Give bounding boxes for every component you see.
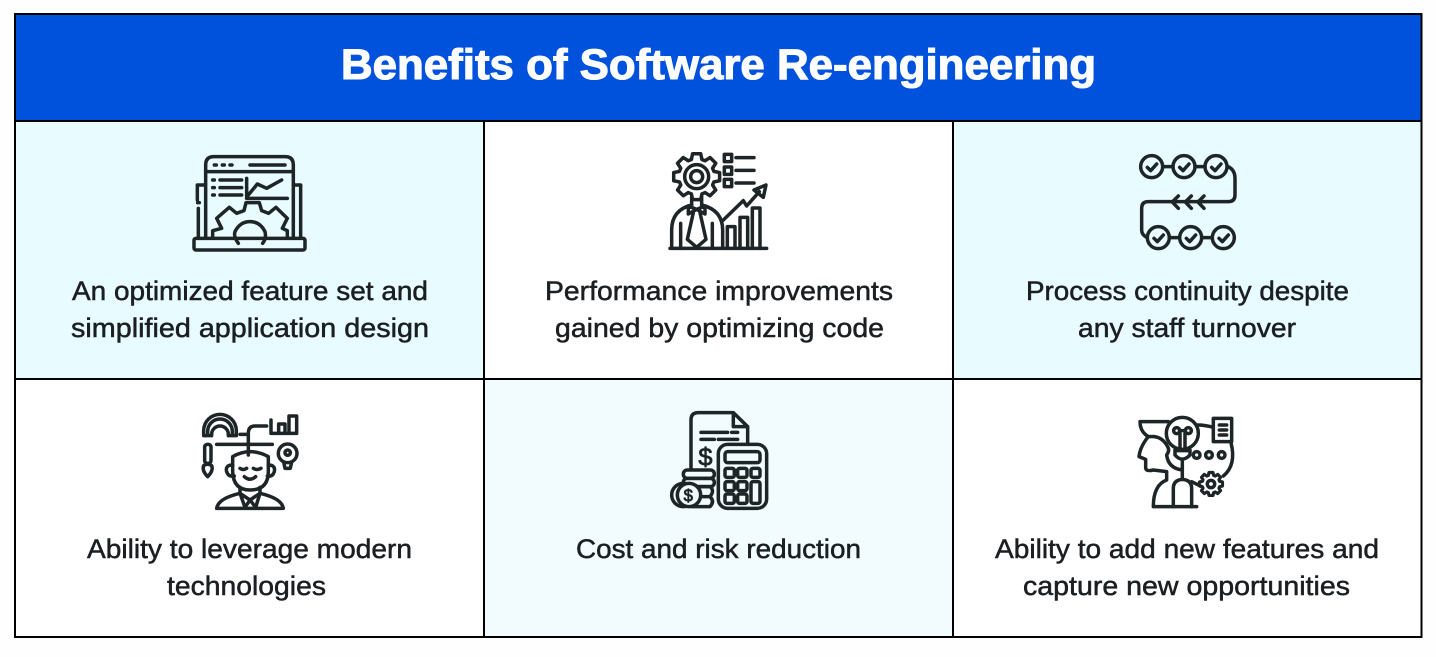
title: Benefits of Software Re-engineering [341,41,1096,89]
text: process continuity: Process continuity despite [1026,276,1349,306]
icon: laptop with gear [194,157,305,250]
text: cost and risk reduction: Cost and risk reduction [576,534,861,564]
text: new features: Ability to add new features and [995,534,1379,564]
text: process continuity [1026,276,1349,343]
text: performance improvements: Performance improvements [545,276,893,306]
text: process continuity: any staff turnover [1078,313,1296,343]
icon: invoice, calculator and coins: $ [684,486,693,505]
panel: header band [15,14,1421,121]
icon: business person with gear and chart [670,154,767,248]
panel: new features [954,380,1421,636]
text: new features: capture new opportunities [1023,571,1350,601]
text: optimized feature set: An optimized feature set and [72,276,428,306]
panel: cost and risk reduction [485,380,953,636]
icon: invoice, calculator and coins: $ [698,444,712,472]
icon: process flow checkmarks [1141,156,1235,249]
text: modern technologies: technologies [167,571,326,601]
panel: performance improvements [485,121,953,379]
panel: optimized feature set [15,121,484,379]
text: optimized feature set: simplified application design [71,313,429,343]
text: performance improvements: gained by optimizing code [555,313,884,343]
panel: process continuity [954,121,1421,379]
text: optimized feature set [71,276,429,343]
panel: modern technologies [15,380,484,636]
text: modern technologies [87,534,412,601]
text: performance improvements [545,276,893,343]
icon: profile with light bulb and gear [1139,417,1233,507]
text: modern technologies: Ability to leverage modern [87,534,412,564]
icon: head with technology symbols [203,414,297,508]
text: new features [995,534,1379,601]
icon: invoice, calculator and coins [672,413,767,508]
